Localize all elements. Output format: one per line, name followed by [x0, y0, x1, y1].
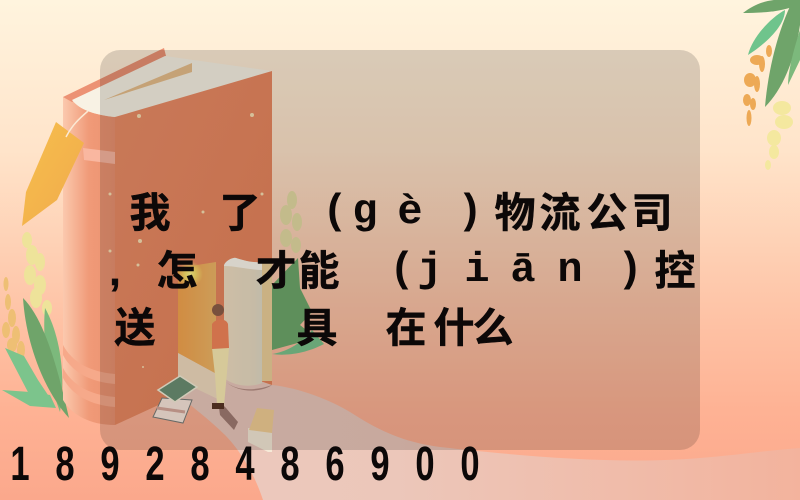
headline: )	[617, 246, 643, 294]
headline: è	[397, 188, 423, 236]
headline: 怎	[156, 248, 198, 294]
headline: 具	[296, 305, 338, 351]
phone number: 0	[415, 436, 435, 490]
headline: 在	[386, 305, 426, 351]
phone number	[10, 436, 480, 490]
headline: (	[322, 188, 348, 236]
illustration: pale wheat left	[22, 232, 52, 316]
headline: 公	[586, 190, 628, 236]
panel overlay	[100, 50, 700, 450]
illustration: leaves centre	[272, 258, 324, 355]
headline: 流	[540, 190, 580, 236]
column shadow	[226, 382, 272, 391]
headline: 物	[494, 190, 536, 236]
sparkles	[108, 113, 264, 368]
phone number: 9	[370, 436, 390, 490]
headline: 么	[472, 305, 514, 351]
person	[212, 304, 238, 430]
book	[63, 48, 272, 425]
headline: 我	[130, 190, 170, 236]
headline: g	[352, 188, 378, 236]
pages	[72, 56, 272, 117]
headline: 才	[256, 248, 296, 294]
books left stack	[153, 376, 197, 423]
headline: ā	[510, 246, 536, 294]
illustration: pale wheat centre	[280, 191, 302, 253]
phone number: 1	[10, 436, 30, 490]
phone number: 4	[235, 436, 255, 490]
spine bands	[83, 148, 115, 164]
headline: i	[464, 246, 490, 294]
phone number: 2	[145, 436, 165, 490]
headline: )	[457, 188, 483, 236]
phone number: 6	[325, 436, 345, 490]
wheat top right pale	[765, 101, 793, 170]
headline: 司	[632, 190, 672, 236]
doorway wall	[178, 262, 216, 374]
phone number: 0	[460, 436, 480, 490]
headline: 什	[434, 305, 474, 351]
illustration: wheat left	[2, 277, 25, 359]
headline: n	[557, 246, 583, 294]
top spine rod	[63, 48, 166, 102]
lamp glow	[177, 261, 203, 287]
phone number: 8	[280, 436, 300, 490]
book cover face	[115, 71, 272, 425]
books right stack	[248, 408, 274, 452]
leaves top right	[743, 0, 800, 107]
floor road	[178, 353, 800, 500]
page column	[224, 258, 262, 386]
book spine	[63, 97, 115, 425]
phone number: 9	[100, 436, 120, 490]
wheat top right orange	[743, 45, 772, 126]
illustration: leaves left	[2, 298, 69, 418]
headline: 送	[114, 305, 156, 351]
bookmark tag	[22, 111, 88, 226]
headline	[109, 188, 696, 351]
page shade	[104, 63, 192, 100]
headline: ,	[109, 248, 121, 294]
column side	[262, 263, 272, 381]
phone number: 8	[190, 436, 210, 490]
floor near wall	[178, 353, 224, 402]
headline: (	[389, 246, 415, 294]
headline: j	[417, 246, 443, 294]
headline: 控	[654, 248, 696, 294]
phone number: 8	[55, 436, 75, 490]
column top	[224, 258, 272, 270]
headline: 能	[298, 248, 340, 294]
headline: 了	[220, 190, 260, 236]
